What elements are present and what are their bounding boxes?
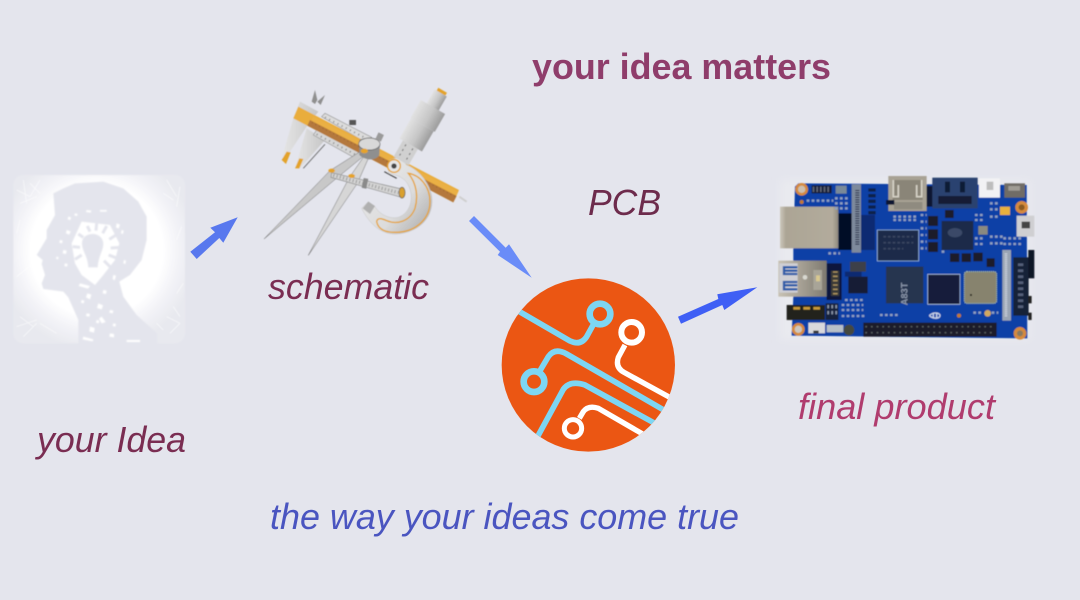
power connector xyxy=(979,178,1000,198)
label: final product: final product xyxy=(798,386,997,427)
caliper rails xyxy=(322,113,372,144)
heading: your idea matters: your idea matters xyxy=(532,46,831,87)
arrow: idea to schematic xyxy=(190,217,238,259)
icon: final product circuit board xyxy=(778,176,1034,340)
caliper prongs xyxy=(312,90,325,105)
gpio header xyxy=(863,323,997,337)
usb xyxy=(778,261,827,297)
audio jack and switch xyxy=(787,305,825,320)
inductors xyxy=(928,216,938,226)
icon: final product circuit board: A83T xyxy=(899,282,909,305)
fpc connector left xyxy=(852,184,861,253)
tagline: the way your ideas come true xyxy=(270,496,739,537)
icon: measuring tools xyxy=(264,83,467,255)
micrometer frame xyxy=(362,157,432,234)
small parts xyxy=(807,198,1023,316)
micro usb side xyxy=(1017,216,1034,237)
sata xyxy=(932,178,978,208)
blue traces xyxy=(517,304,667,438)
compass xyxy=(264,151,365,239)
fpc connector right xyxy=(1002,250,1011,321)
chips xyxy=(877,230,919,261)
hdmi xyxy=(888,176,927,211)
top-left header xyxy=(812,185,832,193)
antenna connector xyxy=(984,310,991,317)
arrow: schematic to PCB xyxy=(469,216,532,278)
mounting holes xyxy=(795,183,808,196)
shadow regions xyxy=(838,213,855,250)
micrometer barrel xyxy=(390,83,455,168)
label: your Idea: your Idea xyxy=(34,419,186,460)
white traces xyxy=(564,322,673,437)
ethernet xyxy=(780,207,838,248)
photo backdrop xyxy=(780,180,1030,340)
compass screw xyxy=(331,173,400,197)
label: schematic: schematic xyxy=(268,266,429,307)
infographic canvas xyxy=(14,52,1036,536)
caliper jaws xyxy=(282,102,318,158)
logo mark xyxy=(929,313,940,319)
ruler xyxy=(293,107,459,202)
label: PCB: PCB xyxy=(588,182,661,223)
icon: PCB circuit badge xyxy=(502,278,675,452)
arrow: PCB to final product xyxy=(678,287,757,324)
board xyxy=(792,183,1027,338)
micro usb top xyxy=(1004,183,1025,198)
icon: head with light bulb xyxy=(13,175,185,344)
